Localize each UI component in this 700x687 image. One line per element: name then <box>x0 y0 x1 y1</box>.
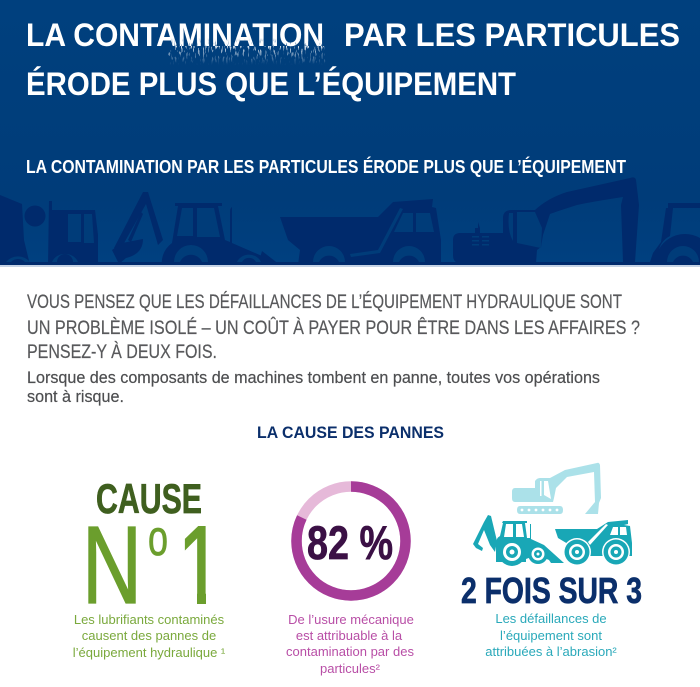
number: no 1 <box>88 526 206 604</box>
caption: abrasion: attribuées à l’abrasion² <box>485 644 617 659</box>
caption: lubricants <box>73 612 226 660</box>
caption: abrasion: Les défaillances de <box>495 611 607 626</box>
text block: intro: PENSEZ-Y À DEUX FOIS. <box>27 340 217 363</box>
caption: wear <box>286 612 414 676</box>
text block: risk statement <box>27 369 600 406</box>
panel: cause no 1 <box>73 475 226 660</box>
title: PAR LES PARTICULES <box>344 17 680 53</box>
caption: abrasion: l’équipement sont <box>500 628 602 643</box>
caption: wear: De l’usure mécanique <box>288 612 414 627</box>
panel: header band <box>0 0 700 268</box>
heading: cause: CAUSE <box>96 475 202 522</box>
icon: dump truck <box>555 520 632 566</box>
text block: intro <box>27 290 640 363</box>
title <box>26 17 680 102</box>
caption: lubricants: Les lubrifiants contaminés <box>74 612 225 627</box>
subtitle: LA CONTAMINATION PAR LES PARTICULES ÉRODE PLUS QUE L’ÉQUIPEMENT <box>26 156 626 177</box>
icon: header machinery silhouettes <box>0 177 700 268</box>
caption: wear: contamination par des <box>286 644 414 659</box>
number: no 1: N <box>82 504 142 627</box>
icon: backhoe loader <box>473 515 564 566</box>
caption: abrasion <box>485 611 617 659</box>
text block: risk statement: Lorsque des composants de machines tombent en panne, toutes vos opérations <box>27 369 600 387</box>
caption: lubricants: l’équipement hydraulique ¹ <box>73 645 226 660</box>
number: 82 percent: 82 % <box>307 516 393 569</box>
title: ÉRODE PLUS QUE L’ÉQUIPEMENT <box>26 66 516 102</box>
icon: excavator <box>512 463 601 514</box>
number: no 1: o <box>148 510 168 566</box>
particle erosion on title <box>168 38 326 65</box>
number: 2 out of 3: 2 FOIS SUR 3 <box>461 570 642 611</box>
icon: header wheels <box>6 245 699 262</box>
caption: wear: particules² <box>320 661 381 676</box>
text block: risk statement: sont à risque. <box>27 388 124 406</box>
number: no 1: 1 <box>178 504 222 627</box>
panel: 82 percent <box>286 486 414 676</box>
heading: causes: LA CAUSE DES PANNES <box>257 423 444 442</box>
caption: wear: est attribuable à la <box>296 628 403 643</box>
caption: lubricants: causent des pannes de <box>82 628 216 643</box>
panel: 2 out of 3 <box>461 463 642 659</box>
title: LA CONTAMINATION <box>26 17 324 53</box>
chart: donut 82 percent <box>296 486 406 596</box>
